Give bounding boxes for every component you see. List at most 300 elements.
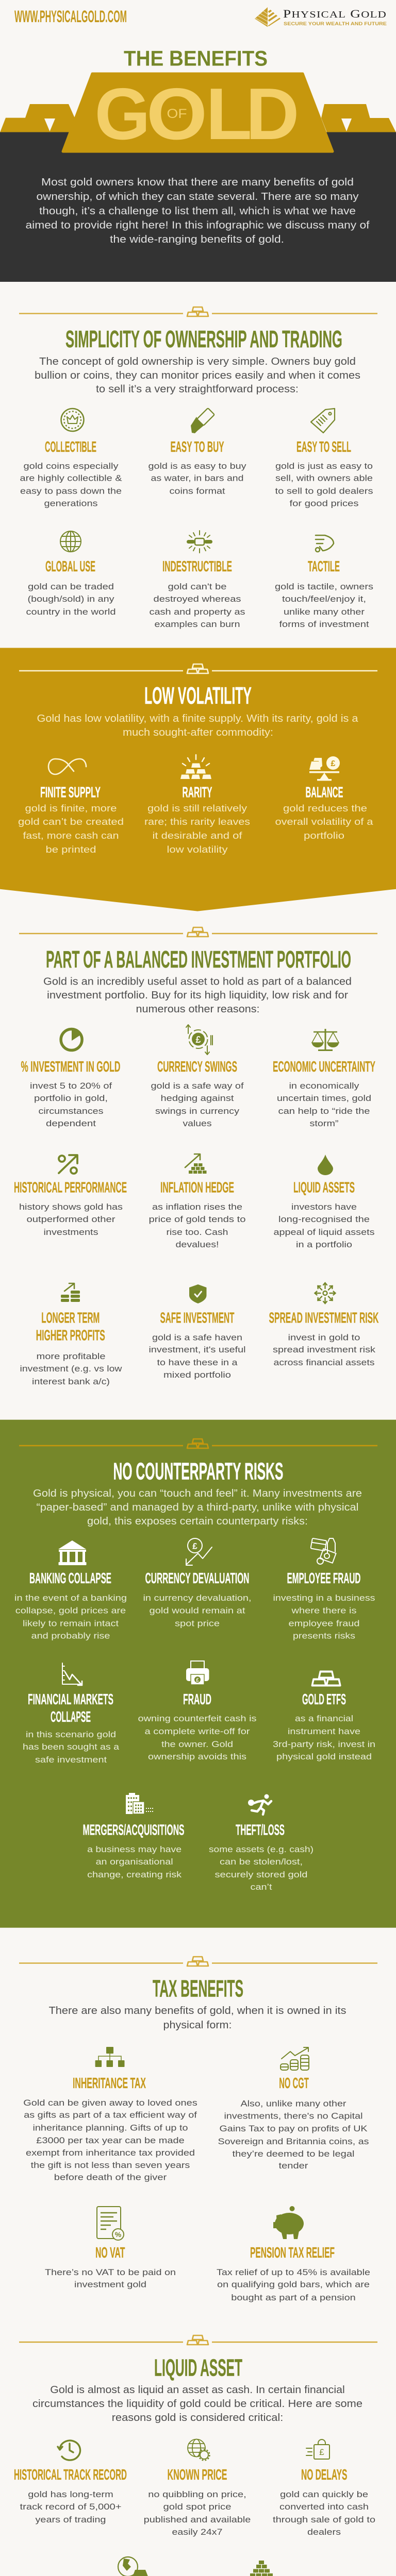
description: forms of investment xyxy=(279,619,369,629)
description: can help to “ride the xyxy=(278,1106,370,1116)
description: swings in currency xyxy=(155,1106,240,1116)
description: investments, there's no Capital xyxy=(224,2111,363,2121)
label: KNOWN PRICE xyxy=(167,2467,227,2483)
label: HISTORICAL TRACK RECORD xyxy=(14,2467,127,2483)
card: theft and loss xyxy=(209,1794,314,1892)
description: has been sought as a xyxy=(23,1742,120,1752)
card: easy to buy xyxy=(148,408,246,496)
description: spread investment risk xyxy=(273,1345,376,1354)
description: to sell to gold dealers xyxy=(275,486,373,496)
label: CURRENCY SWINGS xyxy=(157,1059,237,1075)
card: inheritance tax xyxy=(23,2047,197,2182)
label xyxy=(36,1310,105,1344)
description: some assets (e.g. cash) xyxy=(209,1844,314,1854)
description: the owner. Gold xyxy=(161,1739,233,1749)
card: volume independent xyxy=(213,2561,309,2576)
description: long-recognised the xyxy=(278,1214,370,1224)
description xyxy=(87,1844,182,1879)
intro text xyxy=(48,2005,346,2031)
word: gold: D xyxy=(245,73,299,155)
description xyxy=(275,461,373,508)
description xyxy=(209,1844,314,1892)
label: RARITY xyxy=(183,784,212,801)
label: MERGERS/ACQUISITIONS xyxy=(82,1822,185,1838)
card: collectible xyxy=(20,409,122,508)
description: instrument have xyxy=(288,1726,360,1736)
description: price of gold tends to xyxy=(148,1214,245,1224)
intro text: to sell it’s a very straightforward process: xyxy=(96,383,299,395)
description: portfolio xyxy=(304,831,344,841)
label: FRAUD xyxy=(183,1691,211,1708)
description: spot price xyxy=(175,1618,220,1628)
description xyxy=(20,1351,122,1386)
description: investment, it's useful xyxy=(148,1345,245,1354)
description: safe investment xyxy=(35,1755,107,1765)
description xyxy=(143,1593,252,1628)
description: uncertain times, gold xyxy=(277,1093,371,1103)
description: overall volatility of a xyxy=(275,817,374,827)
icon: falling chart xyxy=(62,1663,82,1685)
description: years of trading xyxy=(35,2515,106,2524)
icon: divider gold bars xyxy=(19,2335,377,2345)
description: in currency devaluation, xyxy=(143,1593,252,1603)
description: be printed xyxy=(45,844,96,855)
description: as gifts as part of a tax efficient way of xyxy=(24,2110,197,2120)
logo tagline: SECURE YOUR WEALTH AND FUTURE xyxy=(284,21,387,27)
intro text: reasons gold is considered critical: xyxy=(112,2412,283,2424)
card: finite supply xyxy=(18,759,124,855)
description: presents risks xyxy=(293,1631,355,1640)
description xyxy=(19,1202,123,1237)
panel: title with gold bars xyxy=(0,46,396,282)
description: can’t xyxy=(251,1882,272,1892)
intro text xyxy=(35,356,360,395)
description: cash and property as xyxy=(150,607,245,617)
panel: header xyxy=(14,7,387,27)
card: type of currency xyxy=(78,2557,191,2576)
intro text: aimed to provide right here! In this infographic we discuss many of xyxy=(26,219,370,231)
description: Gold can be given away to loved ones xyxy=(23,2098,197,2108)
panel: tax benefits xyxy=(19,1957,377,2302)
description: gold is as easy to buy xyxy=(148,461,246,471)
icon: currency arrows xyxy=(186,1025,212,1055)
word: gold xyxy=(95,73,299,155)
description: before death of the giver xyxy=(54,2172,167,2182)
description: portfolio in gold, xyxy=(34,1093,108,1103)
description: low volatility xyxy=(167,844,228,855)
description: appeal of liquid assets xyxy=(273,1227,374,1237)
icon: bank xyxy=(58,1540,87,1565)
icon: printer with banknote xyxy=(186,1661,209,1685)
label: THEFT/LOSS xyxy=(236,1822,285,1838)
description: investment gold xyxy=(74,2280,146,2290)
icon: buildings xyxy=(126,1793,153,1814)
description: dependent xyxy=(46,1118,96,1128)
icon: hand with coin xyxy=(316,535,334,552)
description: in the event of a banking xyxy=(14,1593,127,1603)
intro text: investment portfolio. Buy for its high liquidity, low risk and for xyxy=(47,990,348,1001)
card: percent investment in gold xyxy=(21,1028,121,1128)
description xyxy=(23,1730,120,1765)
card: tactile xyxy=(275,535,373,629)
intro text xyxy=(43,976,352,1015)
card: balance xyxy=(275,756,374,841)
description xyxy=(275,803,374,841)
icon: clock with arrow xyxy=(58,2441,80,2460)
icon: currency arrows: £ xyxy=(195,1035,201,1045)
icon: printer with banknote: £ xyxy=(196,1677,199,1683)
card: currency devaluation xyxy=(143,1538,252,1628)
icon: drop xyxy=(318,1155,333,1175)
description xyxy=(14,1593,127,1640)
description: tender xyxy=(278,2161,308,2171)
label: HISTORICAL PERFORMANCE xyxy=(14,1180,127,1196)
description: easy to pass down the xyxy=(20,486,122,496)
intro text: the wide-ranging benefits of gold. xyxy=(110,234,284,245)
label: GOLD ETFS xyxy=(302,1691,346,1708)
icon: rising coins xyxy=(280,2047,309,2070)
description: sell, with owners able xyxy=(275,473,373,483)
label: INFLATION HEDGE xyxy=(160,1180,234,1196)
icon: shopping bag xyxy=(306,2439,329,2459)
icon: piggy bank xyxy=(273,2206,304,2239)
icon: falling currency: £ xyxy=(192,1541,197,1551)
icon: running thief xyxy=(248,1794,271,1815)
description xyxy=(18,803,124,855)
intro text: Gold is almost as liquid an asset as cash. In certain financial xyxy=(50,2384,345,2396)
intro text: physical form: xyxy=(163,2020,232,2031)
card: known price xyxy=(144,2439,251,2537)
description: across financial assets xyxy=(273,1358,374,1367)
icon: shopping bag: £ xyxy=(319,2447,324,2457)
card: historical performance xyxy=(14,1155,127,1237)
description: gold is a safe way of xyxy=(151,1081,244,1091)
description: examples can burn xyxy=(155,619,240,629)
icon: divider gold bars xyxy=(19,1957,377,1966)
green panel background xyxy=(0,1420,396,1928)
description: published and available xyxy=(144,2515,251,2524)
intro text: Most gold owners know that there are many benefits of gold xyxy=(41,177,354,188)
word: gold: O xyxy=(146,73,207,155)
description xyxy=(26,582,116,617)
card: rarity xyxy=(144,755,250,855)
description: in this scenario gold xyxy=(26,1730,116,1739)
intro text xyxy=(37,713,358,738)
description: Gains Tax to pay on profits of UK xyxy=(220,2124,368,2133)
card: historical track record xyxy=(14,2441,127,2524)
card: no vat xyxy=(45,2207,176,2290)
description: exempt from inheritance tax provided xyxy=(26,2148,195,2158)
description: circumstances xyxy=(38,1106,103,1116)
icon: balance scale: £ xyxy=(331,759,336,768)
icon: percent with arrow xyxy=(59,1155,77,1174)
icon: valuables xyxy=(310,1538,336,1564)
description: invest 5 to 20% of xyxy=(30,1081,112,1091)
intro text: circumstances the liquidity of gold could be critical. Here are some xyxy=(32,2398,362,2410)
label: NO VAT xyxy=(95,2245,125,2261)
description: as inflation rises the xyxy=(152,1202,242,1212)
label: NO CGT xyxy=(279,2075,309,2092)
description: Tax relief of up to 45% is available xyxy=(217,2267,370,2277)
icon: outline gold bars xyxy=(312,1671,340,1686)
intro text: Gold has low volatility, with a finite supply. With its rarity, gold is a xyxy=(37,713,358,724)
word: gold: L xyxy=(206,73,252,155)
description: employee fraud xyxy=(289,1618,360,1628)
icon: chain xyxy=(187,531,212,553)
description: gold spot price xyxy=(163,2502,231,2512)
description: an organisational xyxy=(96,1857,173,1867)
description: a complete write-off for xyxy=(144,1726,250,1736)
description: in a portfolio xyxy=(296,1240,352,1249)
description xyxy=(138,1714,257,1761)
label: NO DELAYS xyxy=(301,2467,347,2483)
word: of: OF xyxy=(167,107,187,121)
icon: earth with gold bar xyxy=(118,2557,148,2576)
description: gold is a safe haven xyxy=(152,1332,242,1342)
description: investors have xyxy=(291,1202,357,1212)
description xyxy=(144,803,250,855)
description xyxy=(273,1202,374,1249)
description: gold can be traded xyxy=(28,582,114,591)
description: owning counterfeit cash is xyxy=(138,1714,257,1723)
description: converted into cash xyxy=(279,2502,369,2512)
icon: arrow over gold stack xyxy=(185,1154,206,1174)
icon: balance scale xyxy=(309,756,340,781)
label: CURRENCY DEVALUATION xyxy=(145,1570,250,1587)
label: FINITE SUPPLY xyxy=(40,784,101,801)
icon: globe xyxy=(60,531,81,552)
description xyxy=(148,461,246,496)
description: invest in gold to xyxy=(288,1332,360,1342)
description: country in the world xyxy=(26,607,116,617)
card: economic uncertainty xyxy=(273,1029,375,1128)
card: inflation hedge xyxy=(148,1154,245,1249)
intro dark panel xyxy=(0,132,396,282)
label xyxy=(28,1691,113,1725)
heading: LIQUID ASSET xyxy=(154,2354,242,2381)
description: track record of 5,000+ xyxy=(20,2502,122,2512)
description: collapse, gold prices are xyxy=(15,1605,126,1615)
description: securely stored gold xyxy=(214,1870,307,1879)
description: gold can’t be created xyxy=(18,817,124,827)
description: devalues! xyxy=(175,1240,219,1249)
icon: shield xyxy=(189,1284,206,1303)
panel: part of a balanced investment portfolio xyxy=(14,927,379,1386)
label: INHERITANCE TAX xyxy=(73,2075,146,2092)
description: inheritance planning. Gifts of up to xyxy=(33,2123,188,2133)
description xyxy=(23,2098,197,2182)
card: collectible: COLLECTIBLE xyxy=(45,439,96,455)
description: through sale of gold to xyxy=(273,2515,375,2524)
description: destroyed whereas xyxy=(154,594,241,604)
label: INDESTRUCTIBLE xyxy=(162,558,232,575)
card: financial markets collapse xyxy=(23,1663,120,1765)
icon: spreading arrows xyxy=(315,1283,335,1303)
description: (bough/sold) in any xyxy=(28,594,114,604)
logo wordmark: PHYSICAL G OLD xyxy=(283,7,387,20)
card: no cgt xyxy=(218,2047,369,2171)
description: mixed portfolio xyxy=(163,1370,231,1380)
label: BANKING COLLAPSE xyxy=(29,1570,111,1587)
icon: pie gauge xyxy=(61,1028,82,1050)
card: no delays xyxy=(273,2439,375,2537)
description: touch/feel/enjoy it, xyxy=(282,594,366,604)
icon: divider gold bars xyxy=(19,1439,377,1448)
description xyxy=(275,582,373,629)
description: gold is still relatively xyxy=(147,803,247,814)
description: a business may have xyxy=(87,1844,182,1854)
description: physical gold instead xyxy=(276,1752,372,1761)
description xyxy=(30,1081,112,1128)
description: it desirable and of xyxy=(153,831,243,841)
card: currency swings xyxy=(151,1025,244,1128)
label: HIGHER PROFITS xyxy=(36,1327,105,1344)
card: gold etfs xyxy=(273,1671,375,1761)
icon: document with percent xyxy=(97,2207,124,2240)
intro text: There are also many benefits of gold, when it is owned in its xyxy=(48,2005,346,2016)
icon: divider gold bars xyxy=(19,664,377,673)
icon: infinity xyxy=(48,759,86,774)
card: easy to sell xyxy=(275,409,373,508)
description: dealers xyxy=(307,2527,341,2537)
icon: price tag xyxy=(311,409,335,433)
intro text: numerous other reasons: xyxy=(136,1004,260,1015)
description: likely to remain intact xyxy=(23,1618,119,1628)
description: fast, more cash can xyxy=(23,831,119,841)
card: global use xyxy=(26,531,116,617)
title: the benefits: THE BENEFITS xyxy=(124,46,268,70)
icon: logo diamond xyxy=(255,7,281,27)
description xyxy=(20,461,122,508)
card: indestructible xyxy=(150,531,245,629)
intro text xyxy=(33,1488,362,1527)
description: and probably rise xyxy=(31,1631,110,1640)
description xyxy=(148,1202,245,1249)
description: ownership avoids this xyxy=(148,1752,246,1761)
description: they’re deemed to be legal xyxy=(232,2149,355,2159)
card: spread investment risk xyxy=(269,1283,379,1367)
description: history shows gold has xyxy=(19,1202,123,1212)
card: fraud xyxy=(138,1661,257,1761)
description: values xyxy=(183,1118,211,1128)
description: as a financial xyxy=(295,1714,353,1723)
card: employee fraud xyxy=(273,1538,375,1640)
description: Sovereign and Britannia coins, as xyxy=(218,2137,369,2146)
description: bought as part of a pension xyxy=(231,2293,356,2302)
label: GLOBAL USE xyxy=(45,558,95,575)
website address: WWW.PHYSICALGOLD.COM xyxy=(14,7,127,26)
description xyxy=(277,1081,371,1128)
description: the gift is not less than seven years xyxy=(31,2160,190,2170)
description: change, creating risk xyxy=(87,1870,182,1879)
gold panel background with chevron xyxy=(0,648,396,911)
big gold bar xyxy=(63,74,333,151)
card: liquid assets xyxy=(273,1155,374,1249)
description xyxy=(151,1081,244,1128)
word: gold: G xyxy=(95,73,151,155)
label: FINANCIAL MARKETS xyxy=(28,1691,113,1708)
label: % INVESTMENT IN GOLD xyxy=(21,1059,121,1075)
description: gold has long-term xyxy=(28,2489,113,2499)
description: gold reduces the xyxy=(283,803,367,814)
description: gold would remain at xyxy=(150,1605,245,1615)
description: gold is just as easy to xyxy=(275,461,373,471)
icon: hand with card xyxy=(191,408,214,433)
description xyxy=(148,1332,245,1380)
description: investing in a business xyxy=(273,1593,375,1603)
description: There’s no VAT to be paid on xyxy=(45,2267,176,2277)
description: rare; this rarity leaves xyxy=(144,817,250,827)
side gold bars xyxy=(0,104,396,132)
intro text xyxy=(32,2384,362,2424)
icon: gold pyramid xyxy=(250,2561,273,2576)
description xyxy=(20,2489,122,2524)
panel: liquid asset xyxy=(14,2335,377,2576)
description: in economically xyxy=(289,1081,359,1091)
label: COLLAPSE xyxy=(51,1709,91,1725)
description: for good prices xyxy=(290,499,359,508)
description: gold can't be xyxy=(168,582,227,591)
icon: hierarchy xyxy=(95,2047,125,2067)
label: TACTILE xyxy=(308,558,340,575)
description xyxy=(218,2099,369,2171)
intro text: bullion or coins, they can monitor prices easily and when it comes xyxy=(35,370,360,381)
panel: low volatility xyxy=(0,648,396,911)
description: rise too. Cash xyxy=(166,1227,228,1237)
intro text xyxy=(26,177,370,245)
intro text: though, it’s a challenge to list them all, which is what we have xyxy=(39,206,356,217)
label: BALANCE xyxy=(305,784,343,801)
description xyxy=(144,2489,251,2537)
panel: no counterparty risks xyxy=(0,1420,396,1928)
logo: Physical Gold xyxy=(255,7,387,27)
label: SAFE INVESTMENT xyxy=(160,1310,235,1326)
icon: divider gold bars xyxy=(19,307,377,316)
description: £3000 per tax year can be made xyxy=(36,2136,185,2145)
description: unlike many other xyxy=(284,607,365,617)
description: hedging against xyxy=(161,1093,234,1103)
description: coins format xyxy=(169,486,225,496)
card: pension tax relief xyxy=(217,2206,370,2302)
icon: globe with gear xyxy=(188,2439,209,2461)
description: gold coins especially xyxy=(24,461,119,471)
description: can be stolen/lost, xyxy=(220,1857,303,1867)
heading: TAX BENEFITS xyxy=(153,1975,243,2002)
description: on qualifying gold bars, which are xyxy=(217,2280,370,2290)
description: where there is xyxy=(291,1605,357,1615)
description: investments xyxy=(43,1227,98,1237)
description: outperformed other xyxy=(27,1214,116,1224)
description: investment (e.g. vs low xyxy=(20,1364,122,1374)
description xyxy=(273,1593,375,1640)
description xyxy=(273,1332,376,1367)
intro text: gold, this exposes certain counterparty risks: xyxy=(87,1516,308,1527)
description: generations xyxy=(44,499,98,508)
description: more profitable xyxy=(36,1351,105,1361)
intro text: Gold is physical, you can “touch and feel” it. Many investments are xyxy=(33,1488,362,1499)
description: easily 24x7 xyxy=(172,2527,223,2537)
card: longer term higher profits xyxy=(20,1283,122,1386)
description: as water, in bars and xyxy=(151,473,243,483)
icon: coin xyxy=(61,409,84,431)
intro text: “paper-based” and managed by a third-party, unlike with physical xyxy=(36,1502,359,1513)
intro text: Gold is an incredibly useful asset to hold as part of a balanced xyxy=(43,976,352,987)
description: gold is finite, more xyxy=(25,803,117,814)
description xyxy=(273,1714,375,1761)
description: are highly collectible & xyxy=(20,473,122,483)
description: storm” xyxy=(309,1118,339,1128)
description xyxy=(45,2267,176,2290)
